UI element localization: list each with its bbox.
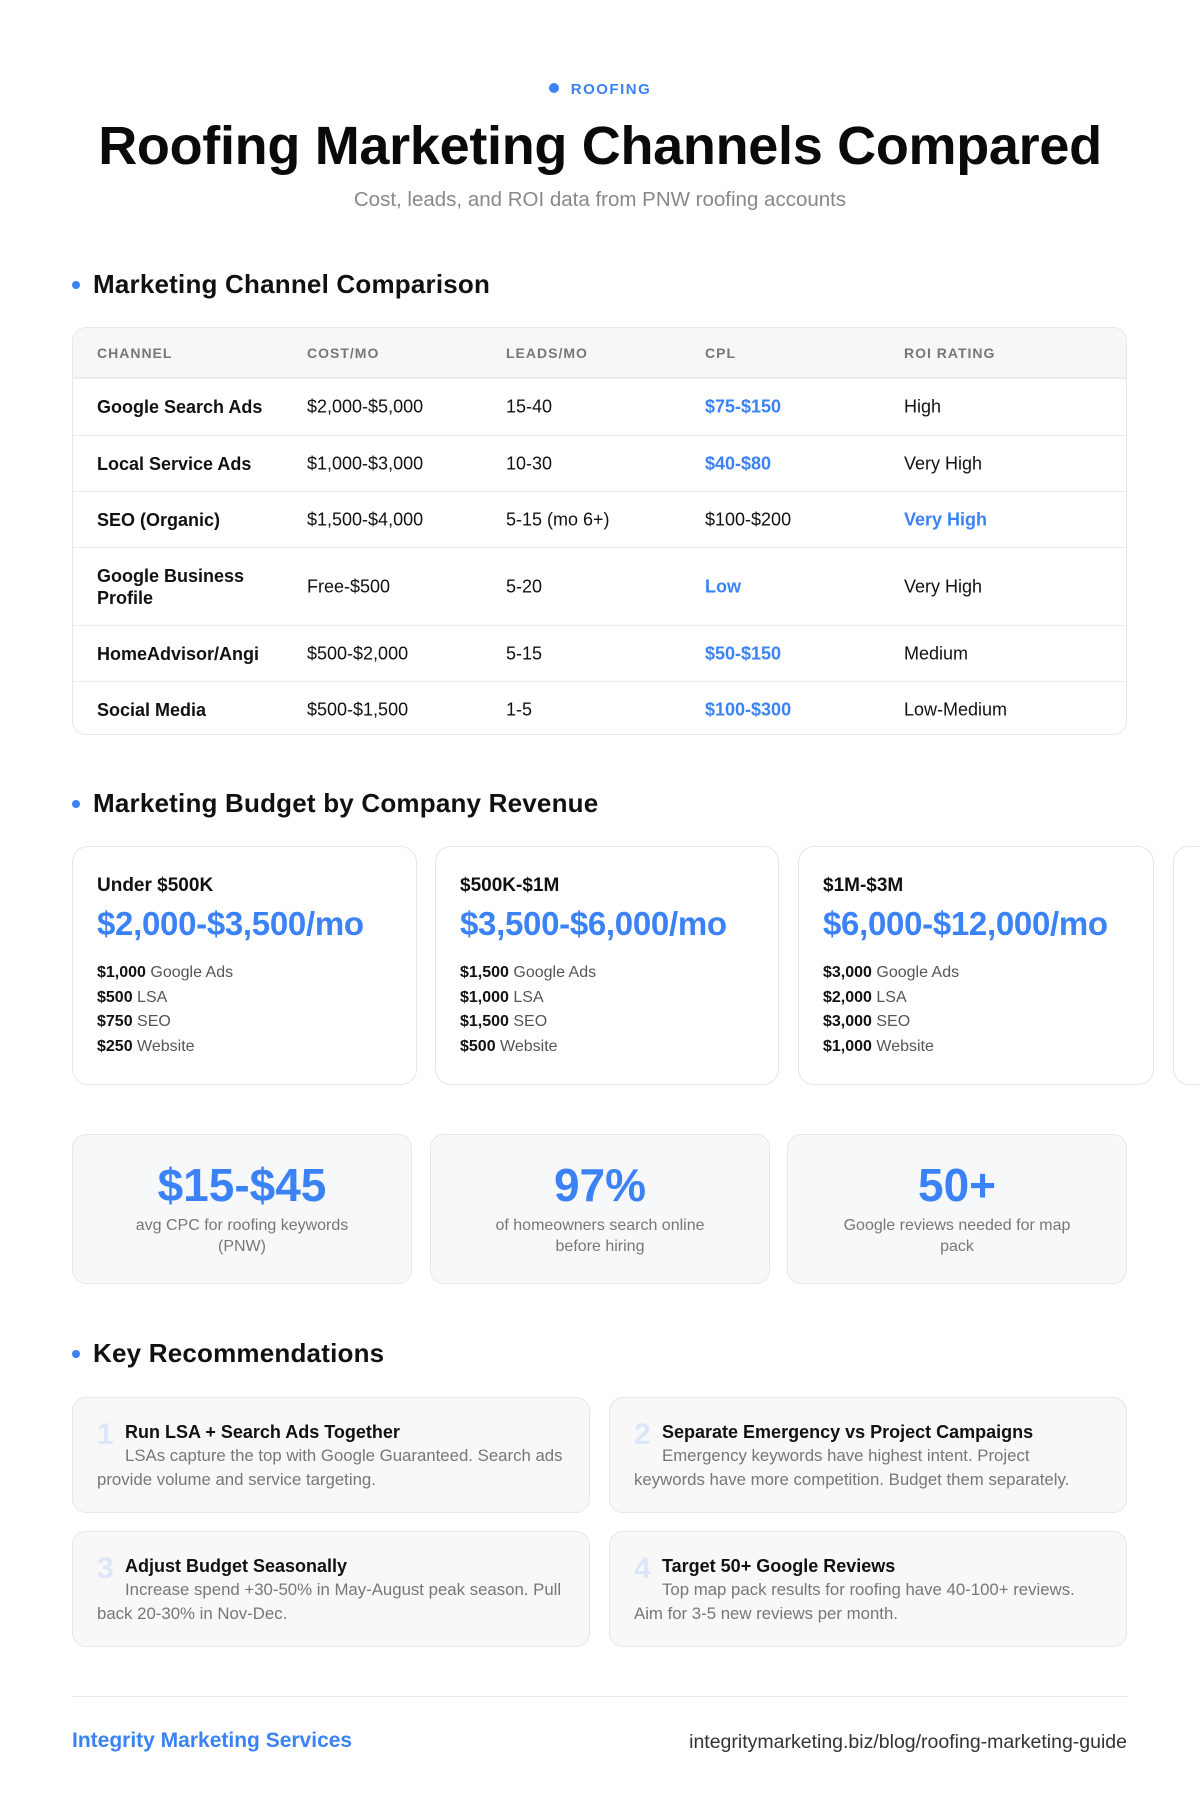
subtitle: Cost, leads, and ROI data from PNW roofing accounts [354,188,846,211]
table: channel comparison: COST/MO [307,344,379,360]
footer brand: Integrity Marketing Services [72,1729,352,1752]
table: channel comparison: $1,000-$3,000 [307,453,423,473]
table: channel comparison: Free-$500 [307,576,390,596]
table: channel comparison: $40-$80 [705,453,771,473]
card: 500K-1M: $3,500-$6,000/mo [460,905,727,942]
rec 2 [609,1397,1127,1513]
card: 1M-3M [798,846,1154,1085]
card: under 500K: $750 SEO [97,1013,171,1030]
rec 4: Top map pack results for roofing have 40-100+ reviews. Aim for 3-5 new reviews per month. [634,1580,1075,1623]
table: channel comparison: Very High [904,509,987,529]
stat: 50+ [787,1134,1127,1284]
heading: channel comparison: Marketing Channel Comparison [93,269,490,299]
card: 500K-1M: $1,500 Google Ads [460,964,596,981]
table: channel comparison: SEO (Organic) [97,510,220,530]
table: channel comparison: $100-$200 [705,509,791,529]
table: channel comparison: $100-$300 [705,699,791,719]
card: 500K-1M: $500 Website [460,1038,558,1054]
table: channel comparison: Very High [904,576,982,596]
card: clipped fourth [1173,846,1200,1085]
table: channel comparison: High [904,396,941,416]
table: channel comparison: Social Media [97,700,206,720]
table: channel comparison: 15-40 [506,396,552,416]
rec 3: Increase spend +30-50% in May-August peak season. Pull back 20-30% in Nov-Dec. [97,1580,561,1623]
rec 4: Target 50+ Google Reviews [662,1556,895,1576]
rec 2: Separate Emergency vs Project Campaigns [662,1422,1033,1442]
table: channel comparison: $75-$150 [705,396,781,416]
table: channel comparison: Low [705,576,741,596]
card: 1M-3M: $1,000 Website [823,1038,934,1054]
heading: key recommendations: Key Recommendations [93,1338,384,1368]
table: channel comparison: 5-20 [506,576,542,596]
stat: 97%: of homeowners search online before hiring [495,1217,704,1255]
table: channel comparison: Low-Medium [904,699,1007,719]
table: channel comparison: $2,000-$5,000 [307,396,423,416]
table: channel comparison: Local Service Ads [97,454,251,474]
rec 2: 2 [634,1418,651,1451]
rec 1 [72,1397,590,1513]
stat: 50+: Google reviews needed for map pack [844,1217,1070,1255]
table: channel comparison: $500-$2,000 [307,643,408,663]
table: channel comparison: ROI RATING [904,344,995,360]
table: channel comparison: $500-$1,500 [307,699,408,719]
table: channel comparison: 1-5 [506,699,532,719]
table: channel comparison: CPL [705,344,736,360]
table: channel comparison: Google Business Profile [97,566,244,608]
rec 2: Emergency keywords have highest intent. Project keywords have more competition. Budget them separately. [634,1446,1069,1489]
rec 1: 1 [97,1418,114,1451]
rec 3: 3 [97,1552,114,1585]
table: channel comparison: HomeAdvisor/Angi [97,644,259,664]
card: 1M-3M: $3,000 SEO [823,1013,910,1030]
rec 3: Adjust Budget Seasonally [125,1556,347,1576]
table: channel comparison: $1,500-$4,000 [307,509,423,529]
table: channel comparison: Very High [904,453,982,473]
card: 500K-1M: $500K-$1M [460,875,559,896]
card: under 500K: $500 LSA [97,988,167,1006]
card: 1M-3M: $6,000-$12,000/mo [823,905,1108,942]
title: Roofing Marketing Channels Compared [98,116,1102,176]
table: channel comparison: 10-30 [506,453,552,473]
rec 4: 4 [634,1552,651,1585]
rec 1: LSAs capture the top with Google Guaranteed. Search ads provide volume and service targeting. [97,1446,563,1489]
card: under 500K: Under $500K [97,875,213,896]
card: 1M-3M: $1M-$3M [823,875,903,896]
card: under 500K [72,846,417,1085]
card: 500K-1M [435,846,779,1085]
rec 3 [72,1531,590,1647]
table: channel comparison: 5-15 (mo 6+) [506,509,610,529]
table: channel comparison: CHANNEL [97,344,172,360]
table: channel comparison: Google Search Ads [97,397,262,417]
card: under 500K: $250 Website [97,1038,195,1054]
stat: CPC [72,1134,412,1284]
stat: 97% [430,1134,770,1284]
heading: budget by revenue: Marketing Budget by Company Revenue [93,788,598,818]
card: 500K-1M: $1,000 LSA [460,988,544,1006]
footer url: integritymarketing.biz/blog/roofing-marketing-guide [689,1731,1127,1753]
eyebrow label: ROOFING [571,81,651,98]
table: channel comparison: Medium [904,643,968,663]
table: channel comparison [72,327,1127,735]
stat: CPC: avg CPC for roofing keywords (PNW) [136,1217,348,1255]
rec 4 [609,1531,1127,1647]
table: channel comparison: LEADS/MO [506,344,588,360]
stat: 50+: 50+ [918,1159,996,1211]
table: channel comparison: 5-15 [506,643,542,663]
stat: CPC: $15-$45 [158,1159,326,1211]
card: under 500K: $1,000 Google Ads [97,964,233,981]
card: 1M-3M: $2,000 LSA [823,988,907,1006]
card: 1M-3M: $3,000 Google Ads [823,964,959,981]
table: channel comparison: $50-$150 [705,643,781,663]
card: 500K-1M: $1,500 SEO [460,1013,547,1030]
rec 1: Run LSA + Search Ads Together [125,1422,400,1442]
card: under 500K: $2,000-$3,500/mo [97,905,364,942]
stat: 97%: 97% [554,1159,646,1211]
